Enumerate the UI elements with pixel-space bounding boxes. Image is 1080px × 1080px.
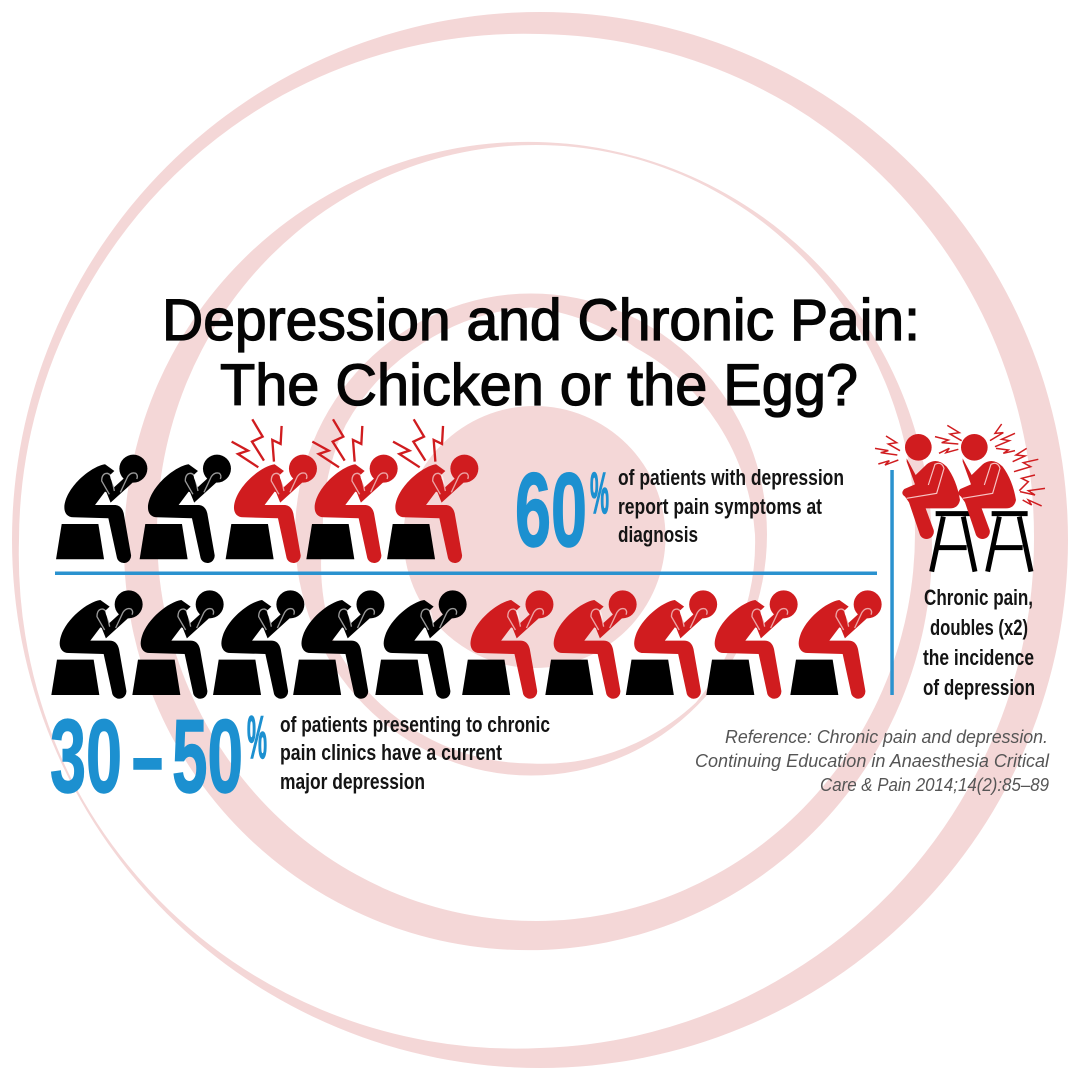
icon: seated figure red with pain bolts 3 <box>387 419 478 563</box>
stat: 60 percent: 60 <box>515 452 587 569</box>
icon: seated figure red 3 <box>626 590 717 699</box>
text: 30 to 50 percent description: major depression <box>280 769 425 794</box>
text: 60 percent description <box>618 465 844 547</box>
icon: seated figure black 2 <box>140 455 231 563</box>
text: 60 percent description: diagnosis <box>618 522 698 547</box>
text: % <box>247 704 267 771</box>
ring: second tapered ring <box>124 142 932 950</box>
icon: seated figure red 4 <box>706 590 798 699</box>
title <box>162 288 920 418</box>
icon: seated figure red 5 <box>790 590 882 699</box>
text: reference citation: Care & Pain 2014;14(2):85–89 <box>820 775 1049 795</box>
panel: top row of five seated figures <box>56 419 478 563</box>
text: 30 to 50 percent description: pain clinics have a current <box>280 740 503 765</box>
icon: seated figure red with pain bolts 1 <box>226 419 317 563</box>
text: reference citation: Continuing Education in Anaesthesia Critical <box>695 751 1050 771</box>
text: chronic pain doubles incidence: the incidence <box>923 645 1034 670</box>
icon: seated figure red 2 <box>545 590 637 699</box>
icon: seated figure red with pain bolts 2 <box>306 419 398 563</box>
icon: seated figure red 1 <box>462 590 553 699</box>
stat: 30 to 50 percent: – <box>132 699 163 815</box>
text: 30 to 50 percent description: of patients presenting to chronic <box>280 712 550 737</box>
icon: seated figure black 2 <box>132 590 224 699</box>
icon: seated figure black 1 <box>56 455 147 563</box>
icon: two red figures on stools with pain bolts <box>875 424 1045 572</box>
title: Depression and Chronic Pain: <box>162 288 920 353</box>
text: 60 percent description: of patients with depression <box>618 465 844 490</box>
text: chronic pain doubles incidence: Chronic pain, <box>924 585 1033 610</box>
divider: vertical blue line <box>890 470 894 695</box>
ring: centre disc <box>404 406 666 668</box>
text: reference citation: Reference: Chronic pain and depression. <box>725 727 1048 747</box>
icon: seated figure black 3 <box>213 590 304 699</box>
text: chronic pain doubles incidence: of depression <box>923 675 1035 700</box>
stat: 30 to 50 percent: 30 <box>50 699 122 815</box>
stat: 30 to 50 percent: 50 <box>172 699 243 815</box>
stat: 30 to 50 percent <box>50 699 267 815</box>
icon: seated figure black 5 <box>375 590 467 699</box>
text: 60 percent description: report pain symptoms at <box>618 494 823 519</box>
title: The Chicken or the Egg? <box>220 353 858 418</box>
divider: horizontal blue line <box>55 572 877 575</box>
text: reference citation <box>695 727 1050 795</box>
panel: second row of ten seated figures <box>51 590 882 699</box>
icon: seated figure black 4 <box>293 590 384 699</box>
icon: seated figure black 1 <box>51 590 143 699</box>
text: % <box>590 461 609 526</box>
text: chronic pain doubles incidence: doubles (x2) <box>930 615 1028 640</box>
text: 30 to 50 percent description <box>280 712 550 794</box>
ring: third tapered ring <box>295 294 767 776</box>
text: chronic pain doubles incidence <box>923 585 1035 700</box>
